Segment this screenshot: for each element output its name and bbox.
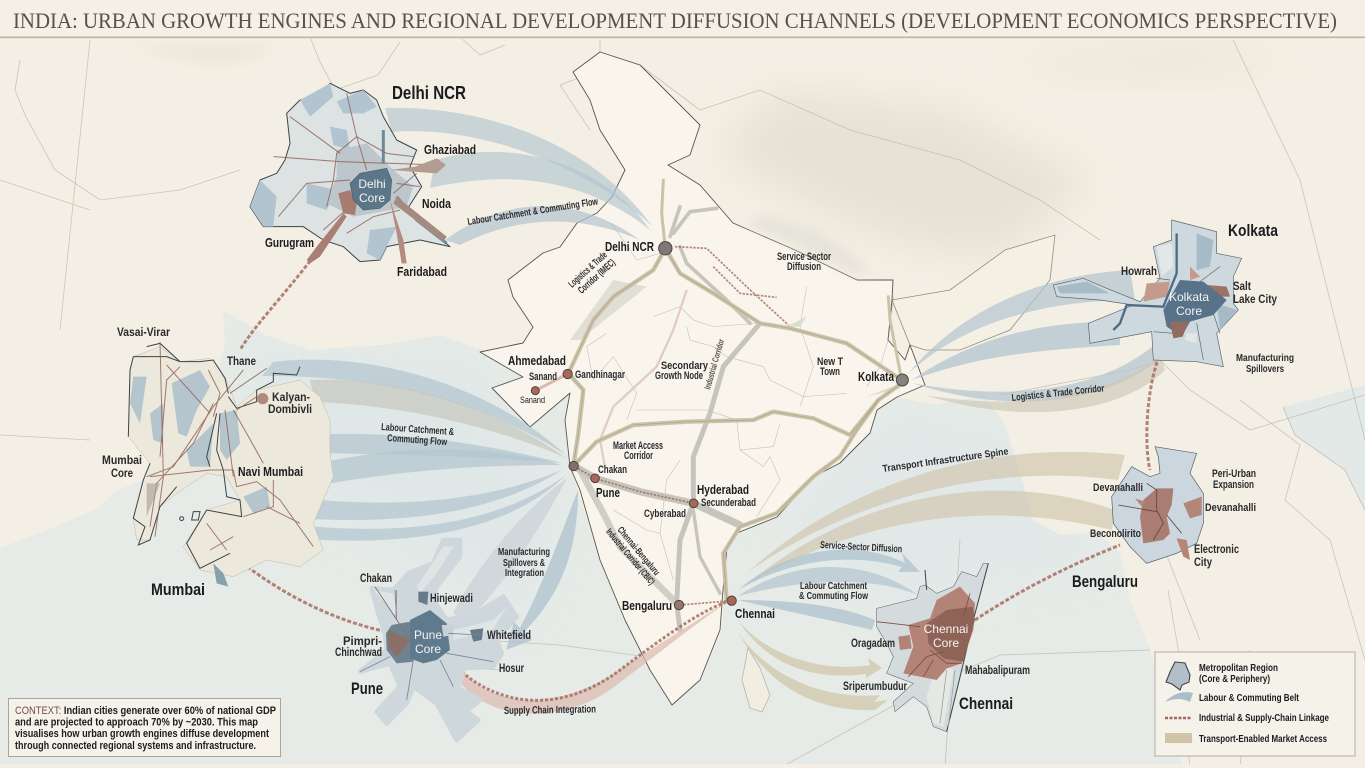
label: Chennai node: Chennai [735, 606, 775, 621]
label: Commuting Flow Mumbai: Commuting Flow [387, 433, 448, 448]
label: Chennai-Bengaluru corridor [603, 520, 664, 587]
label: Sanand: Sanand [529, 371, 557, 383]
label: logistics corridor: Corridor (IMEC) [576, 257, 618, 296]
label: Chennai-Bengaluru corridor: Chennai-Bengaluru [615, 525, 662, 578]
label: Manufacturing Spillovers: Manufacturing [1236, 353, 1294, 364]
central map: state boundaries and corridors [531, 180, 908, 630]
inset: Mumbai metropolitan region [128, 342, 333, 587]
callout: context box: through connected regional systems and infrastructure. [15, 740, 256, 752]
label: Electronic City [1194, 542, 1239, 569]
gray corridors [570, 207, 900, 630]
label: Whitefield: Whitefield [487, 628, 531, 642]
label: Pune Core: Pune [414, 628, 442, 642]
label: Pimpri-Chinchwad: Chinchwad [335, 645, 382, 659]
label: Manufacturing Spillovers: Spillovers [1246, 364, 1284, 375]
label: Sanand sub-node: Sanand [520, 395, 545, 405]
inset: Pune metropolitan region [360, 540, 517, 740]
label: Delhi NCR title: Delhi NCR [392, 83, 466, 103]
label: Howrah: Howrah [1121, 264, 1157, 278]
label: Chennai-Bengaluru corridor: Industrial Corridor (CBIC) [603, 527, 657, 587]
label: Devanahalli west: Devanahalli [1093, 482, 1143, 494]
label: Diffusion: Diffusion [787, 261, 821, 273]
legend text: metropolitan region: (Core & Periphery) [1199, 673, 1270, 685]
legend text: metropolitan region [1199, 662, 1278, 685]
label: Pune Core: Core [415, 642, 441, 656]
label: Manufacturing Spillovers [1236, 353, 1294, 375]
label: Manufacturing Spillovers and Integration: Integration [505, 568, 544, 579]
label: Faridabad: Faridabad [397, 264, 447, 279]
inset: Chennai metropolitan region [877, 563, 988, 732]
callout: context box [8, 698, 280, 756]
label: Pune Core [414, 628, 442, 656]
callout: context box: visualises how urban growth engines diffuse development [15, 728, 269, 740]
label: Chennai title: Chennai [959, 694, 1013, 713]
inset: Kolkata metropolitan region [1053, 220, 1242, 367]
label: Kalyan-Dombivli: Dombivli [268, 402, 312, 416]
transport corridors [568, 180, 902, 600]
label: Kolkata node: Kolkata [858, 369, 895, 384]
label: Delhi NCR node: Delhi NCR [605, 239, 654, 254]
label: Supply Chain Integration: Supply Chain Integration [504, 703, 596, 717]
label: Navi Mumbai: Navi Mumbai [238, 464, 303, 479]
label: Manufacturing Spillovers and Integration: Manufacturing [498, 547, 550, 558]
label: Mumbai Core: Mumbai [102, 453, 142, 467]
legend icon: metropolitan region [1166, 662, 1190, 690]
label: Ahmedabad: Ahmedabad [508, 353, 566, 368]
label: Salt Lake City: Salt [1233, 279, 1251, 293]
label: Electronic City: City [1194, 555, 1212, 569]
label: Electronic City: Electronic [1194, 542, 1239, 556]
label: Labour Catchment flow Chennai: Labour Catchment [800, 581, 868, 592]
label: Salt Lake City: Lake City [1233, 292, 1277, 306]
label: Oragadam: Oragadam [851, 636, 895, 650]
label: Ghaziabad: Ghaziabad [424, 142, 476, 157]
inset: Bengaluru metropolitan region [1112, 447, 1203, 563]
label: Bengaluru title: Bengaluru [1072, 572, 1138, 591]
label: Labour Catchment flow Delhi: Labour Catchment & Commuting Flow [467, 196, 599, 228]
label: Corridor: Corridor [624, 450, 653, 462]
label: Pimpri-Chinchwad: Pimpri- [343, 634, 382, 648]
label: Mumbai Core: Core [111, 466, 133, 480]
label: Cyberabad: Cyberabad [644, 508, 686, 520]
label: Mumbai Core [102, 453, 142, 480]
label: Delhi Core: Core [359, 191, 385, 205]
legend text: market access: Transport-Enabled Market Access [1199, 733, 1327, 745]
flow bands: labour and commuting [245, 108, 1165, 714]
state boundaries [587, 223, 893, 580]
label: Secondary Growth Node [655, 360, 709, 382]
label: Delhi Core [358, 177, 386, 205]
label: Service-Sector Diffusion: Service-Sector Diffusion [820, 540, 902, 555]
label: New Town: New T [817, 356, 843, 368]
callout: context box: CONTEXT: Indian cities generate over 60% of national GDP [15, 705, 276, 717]
label: New Town: Town [820, 366, 840, 378]
legend text: commuting belt: Labour & Commuting Belt [1199, 692, 1299, 704]
label: Chakan: Chakan [360, 571, 392, 585]
label: Manufacturing Spillovers and Integration: Spillovers & [503, 558, 545, 569]
label: Kalyan-Dombivli: Kalyan- [272, 390, 310, 404]
label: Hosur: Hosur [499, 661, 524, 675]
label: Kalyan-Dombivli [268, 390, 312, 416]
label: Bengaluru node: Bengaluru [622, 598, 672, 613]
label: Pune title: Pune [351, 679, 383, 698]
label: Market Access: Market Access [613, 440, 663, 452]
bottom edge band [0, 764, 1365, 768]
inset: Delhi NCR metropolitan region [250, 83, 450, 263]
label: Chakan node: Chakan [598, 464, 627, 476]
hub nodes [531, 242, 908, 610]
legend text: metropolitan region: Metropolitan Region [1199, 662, 1278, 674]
label: Pune node: Pune [596, 485, 620, 500]
callout: context box: and are projected to approach 70% by ~2030. This map [15, 716, 258, 728]
label: Pimpri-Chinchwad [335, 634, 382, 659]
label: Mahabalipuram: Mahabalipuram [965, 663, 1030, 677]
label: Logistics and Trade Corridor: Logistics & Trade Corridor [1011, 383, 1105, 404]
label: Devanahalli east: Devanahalli [1205, 502, 1256, 514]
label: Gurugram: Gurugram [265, 235, 314, 250]
label: Kolkata title: Kolkata [1228, 221, 1278, 240]
label: Vasai-Virar: Vasai-Virar [117, 325, 170, 339]
label: Manufacturing Spillovers and Integration [498, 547, 550, 579]
label: Labour Catchment flow Mumbai: Labour Catchment & [381, 422, 454, 438]
legend [1155, 652, 1355, 756]
India landmass [480, 52, 1055, 712]
label: Gandhinagar: Gandhinagar [575, 369, 626, 381]
label: Thane: Thane [227, 354, 256, 368]
label: vertical corridor text: Industrial Corridor [702, 338, 726, 391]
label: Chennai Core: Chennai [924, 622, 968, 636]
label: Mumbai title: Mumbai [151, 580, 205, 599]
label: Chennai Core: Core [933, 636, 959, 650]
legend icon: market access [1165, 733, 1192, 743]
label: Delhi Core: Delhi [358, 177, 386, 191]
label: Peri-Urban Expansion [1212, 468, 1256, 491]
label: Commuting Flow Chennai: & Commuting Flow [799, 591, 868, 602]
label: Peri-Urban Expansion: Expansion [1213, 479, 1254, 491]
label: Transport Infrastructure Spine: Transport Infrastructure Spine [882, 446, 1010, 475]
label: Service Sector: Service Sector [777, 251, 832, 263]
label: Secondary Growth Node: Secondary [661, 360, 709, 372]
label: Chennai Core [924, 622, 968, 650]
secondary pink corridor [600, 290, 687, 467]
label: Kolkata Core: Core [1176, 304, 1202, 318]
label: Sriperumbudur: Sriperumbudur [843, 679, 907, 693]
long supply chain links between metros [215, 256, 1157, 700]
legend icon: commuting belt [1165, 692, 1193, 702]
supply-chain linkages [535, 247, 788, 605]
legend text: supply chain linkage: Industrial & Supply-Chain Linkage [1199, 712, 1329, 724]
label: Hyderabad: Hyderabad [697, 482, 749, 497]
label: logistics corridor: Logistics & Trade [567, 250, 610, 290]
label: Beconolirito: Beconolirito [1090, 528, 1141, 540]
label: Peri-Urban Expansion: Peri-Urban [1212, 468, 1256, 480]
label: Secondary Growth Node: Growth Node [655, 370, 703, 382]
label: Hinjewadi: Hinjewadi [430, 591, 473, 605]
label: Kolkata Core [1169, 290, 1209, 318]
sea: Arabian Sea and Bay of Bengal [0, 310, 1365, 768]
label: logistics corridor [567, 249, 618, 298]
label: Salt Lake City [1233, 279, 1277, 306]
label: New Town [817, 356, 843, 378]
label: Kolkata Core: Kolkata [1169, 290, 1209, 304]
label: Secunderabad: Secunderabad [701, 497, 756, 509]
label: Noida: Noida [422, 196, 452, 211]
legend icon: supply chain linkage [1165, 717, 1192, 719]
title [0, 0, 1365, 38]
